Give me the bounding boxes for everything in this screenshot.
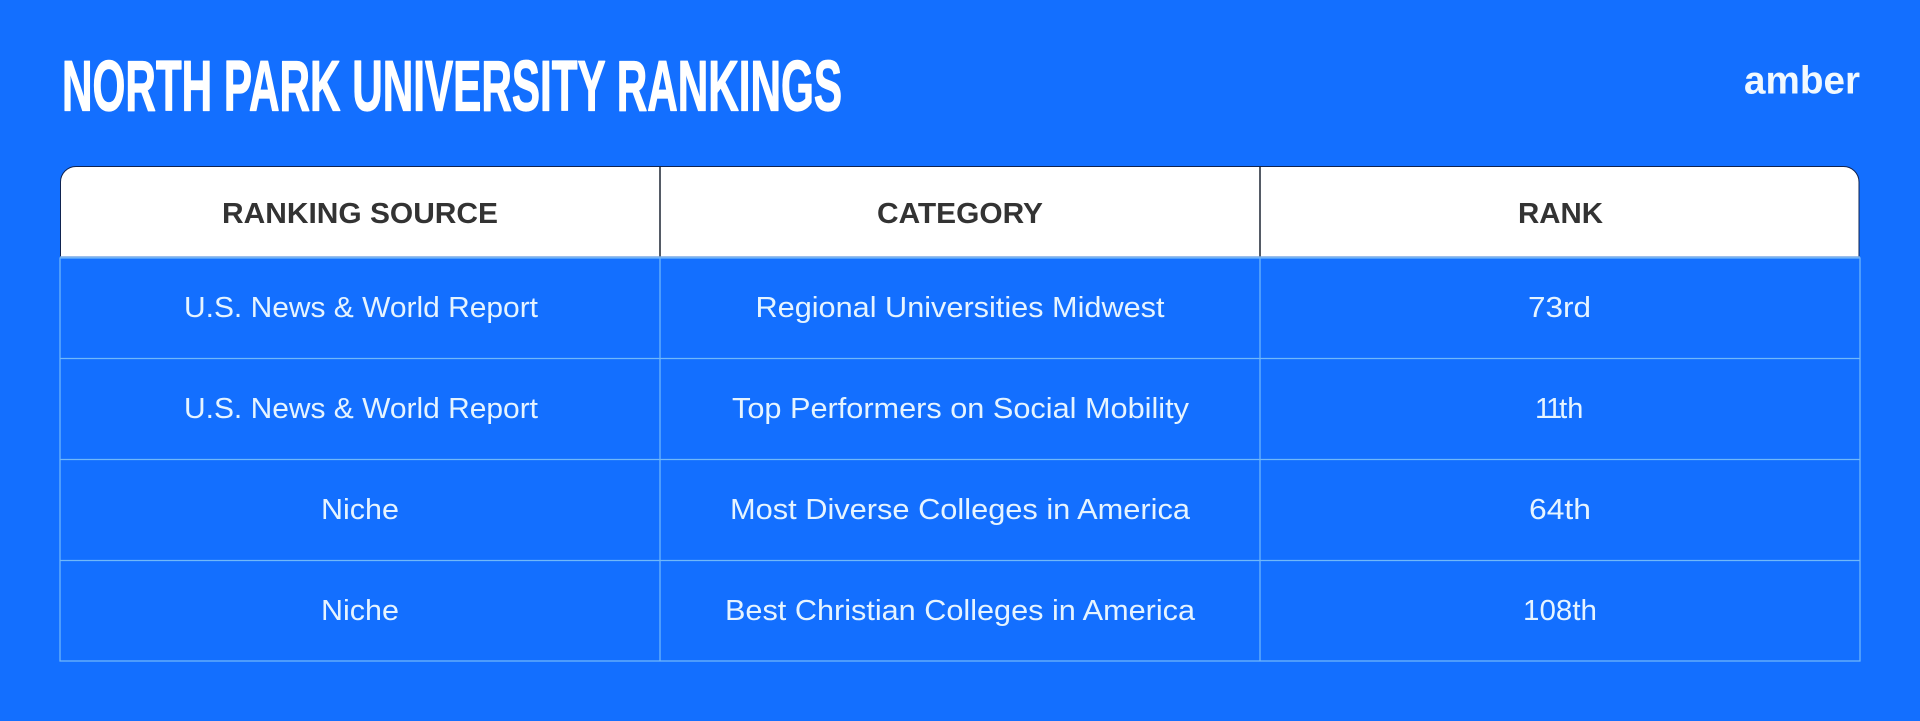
row 2: Top Performers on Social Mobility xyxy=(732,393,1190,425)
table header row xyxy=(60,166,1860,257)
title: NORTH PARK UNIVERSITY RANKINGS xyxy=(62,48,842,126)
row 1: 73rd xyxy=(1528,292,1591,324)
row 2: U.S. News & World Report xyxy=(184,393,538,425)
row 1: Regional Universities Midwest xyxy=(756,292,1164,324)
row 3 xyxy=(321,494,1591,526)
table grid lines xyxy=(60,258,1860,661)
row 4 xyxy=(321,595,1597,627)
row 1: U.S. News & World Report xyxy=(184,292,538,324)
header: category: CATEGORY xyxy=(877,198,1043,230)
header: rank: RANK xyxy=(1518,198,1603,230)
row 4: 108th xyxy=(1523,595,1597,627)
header: ranking source: RANKING SOURCE xyxy=(222,198,498,230)
row 3: Most Diverse Colleges in America xyxy=(730,494,1191,526)
table xyxy=(60,166,1860,661)
row 3: Niche xyxy=(321,494,399,526)
row 2 xyxy=(184,393,1583,425)
row 1 xyxy=(184,292,1591,324)
row 3: 64th xyxy=(1529,494,1591,526)
row 4: Best Christian Colleges in America xyxy=(725,595,1196,627)
row 4: Niche xyxy=(321,595,399,627)
logo: amber: amber xyxy=(1744,60,1860,102)
row 2: 11th xyxy=(1535,393,1583,425)
